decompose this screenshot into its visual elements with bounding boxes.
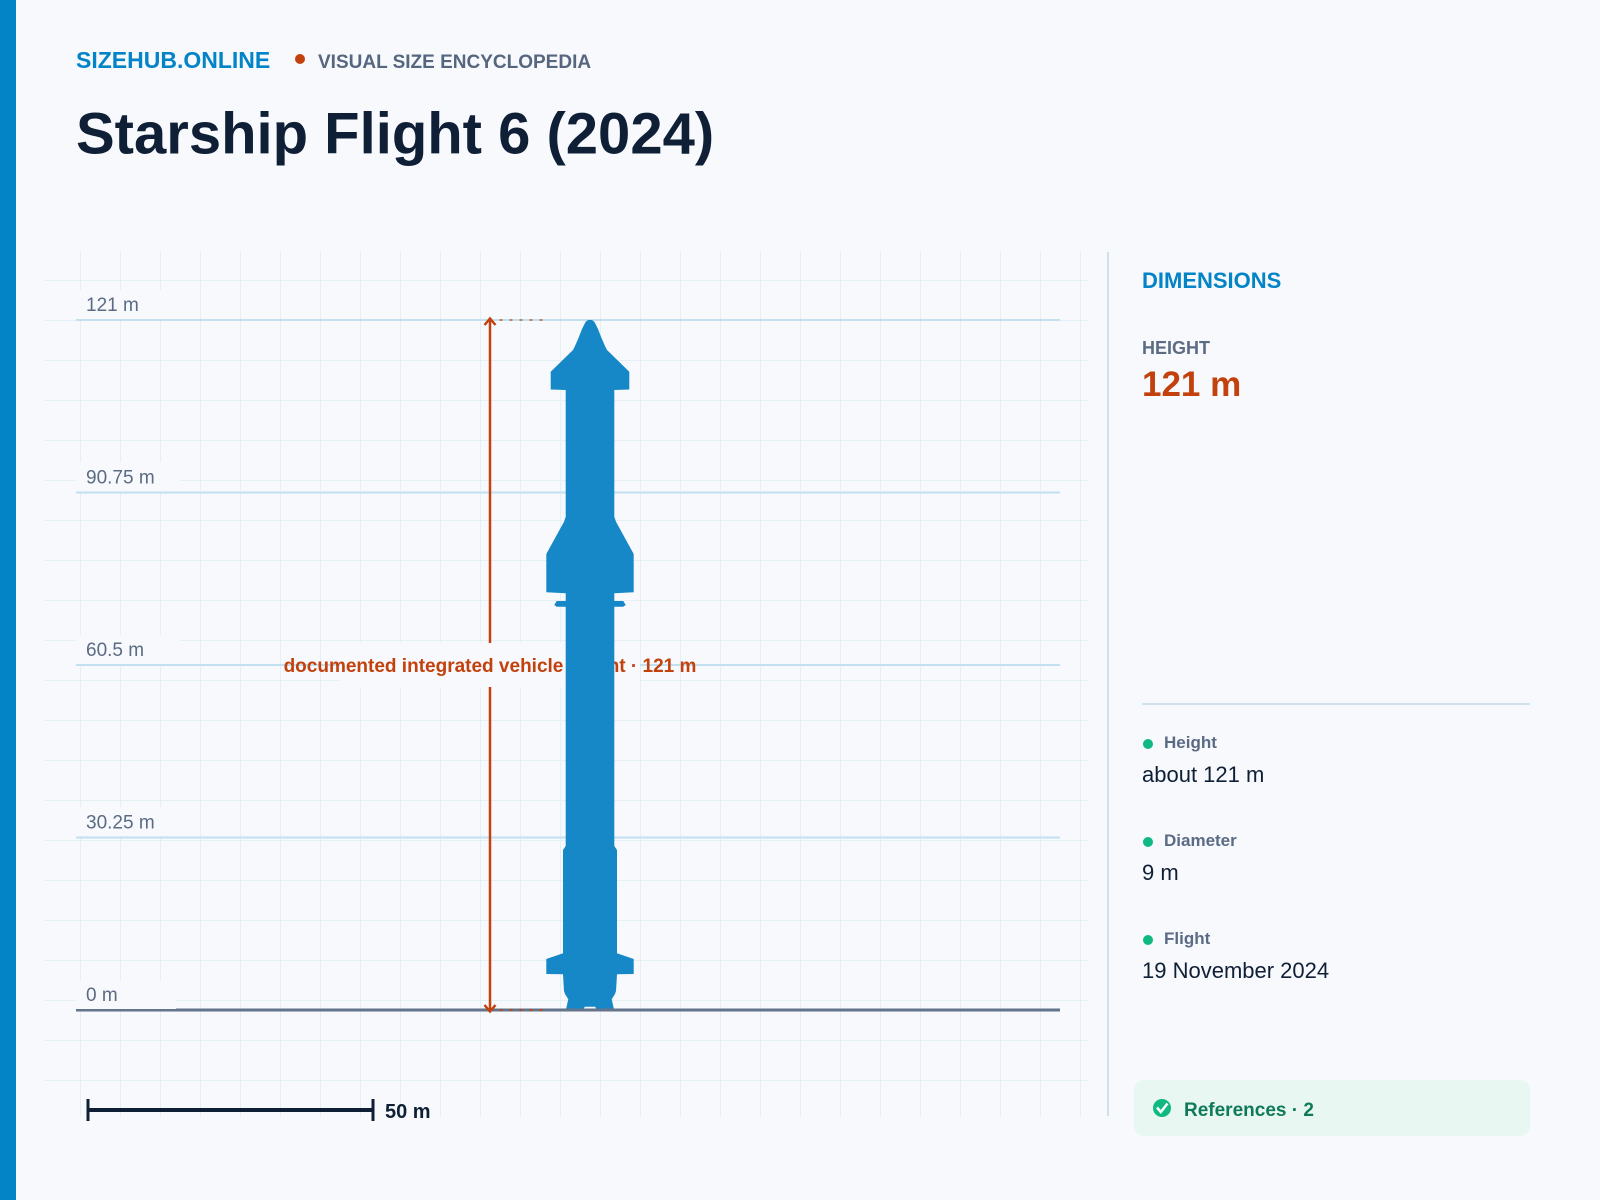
panel: dimensions <box>1108 252 1530 1136</box>
rocket silhouette <box>546 320 634 1008</box>
height arrow <box>484 318 544 1012</box>
axis label: 60.5 m: 60.5 m <box>86 640 144 661</box>
height annotation <box>284 643 696 687</box>
chart: height scale with rocket silhouette <box>44 252 1088 1123</box>
fact: diameter: Diameter <box>1164 831 1237 850</box>
axis label: 90.75 m: 90.75 m <box>86 468 155 488</box>
accent bar <box>0 0 16 1200</box>
scale bar <box>88 1099 431 1123</box>
fact: flight: 19 November 2024 <box>1142 958 1329 983</box>
scale bar label: 50 m <box>385 1101 431 1123</box>
references badge <box>1134 1080 1530 1136</box>
fact: diameter: 9 m <box>1142 860 1179 885</box>
brand dot <box>295 54 305 64</box>
panel heading: DIMENSIONS <box>1142 268 1281 293</box>
references badge: References · 2 <box>1184 1100 1314 1121</box>
brand tagline: VISUAL SIZE ENCYCLOPEDIA <box>318 52 591 73</box>
fact: height: Height <box>1164 733 1217 752</box>
fact: diameter <box>1142 831 1237 885</box>
icon: check <box>1153 1099 1171 1117</box>
title: Starship Flight 6 (2024) <box>76 102 714 166</box>
brand name: SIZEHUB.ONLINE <box>76 47 270 73</box>
axis label: 30.25 m: 30.25 m <box>86 812 155 834</box>
header <box>76 47 591 73</box>
axis label: 0 m: 0 m <box>86 985 118 1006</box>
height annotation: documented integrated vehicle height · 121 m <box>284 656 696 677</box>
height value: 121 m <box>1142 365 1241 404</box>
fact: height <box>1142 733 1264 787</box>
height label: HEIGHT <box>1142 338 1210 358</box>
fact: flight <box>1142 929 1329 983</box>
fact: height: about 121 m <box>1142 762 1264 787</box>
axis label: 121 m: 121 m <box>86 295 139 316</box>
fact: flight: Flight <box>1164 929 1211 948</box>
